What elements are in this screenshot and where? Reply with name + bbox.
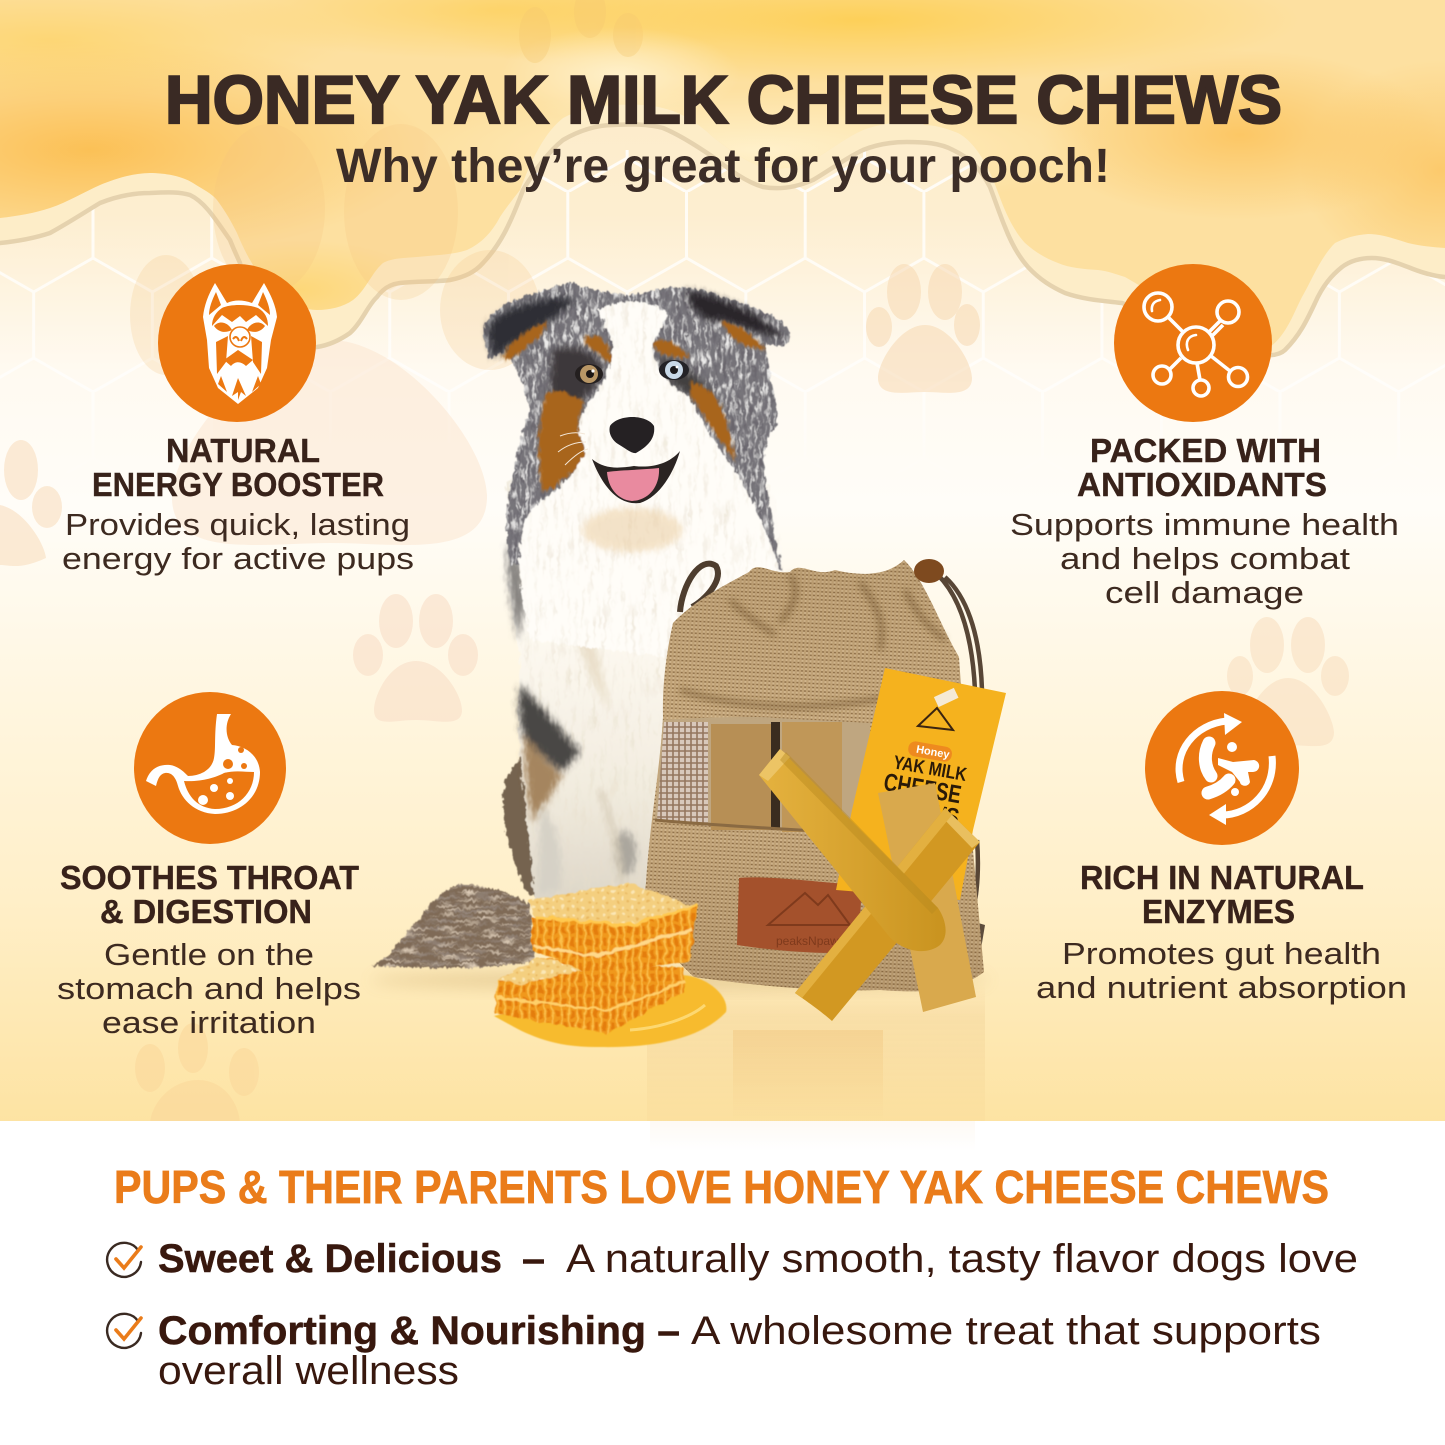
description — [1036, 936, 1407, 1005]
tag heading: CHEESE — [882, 768, 963, 809]
benefit: rich in natural enzymes — [1036, 691, 1407, 1005]
dog right eye — [659, 360, 689, 380]
dog tan markings — [503, 320, 765, 492]
bag rope tassel — [965, 920, 985, 955]
faded paw print: top centre — [519, 0, 643, 63]
bullet one: – — [522, 1237, 545, 1281]
bullet two — [107, 1309, 1321, 1393]
icon: check — [107, 1314, 141, 1348]
dog leg band — [508, 545, 580, 822]
bullet two: Comforting & Nourishing – — [158, 1309, 680, 1353]
bag shading — [645, 560, 984, 991]
description: Gentle on the — [104, 937, 314, 972]
honeycomb pattern — [0, 150, 1445, 381]
description: Promotes gut health — [1062, 936, 1381, 971]
bullet two: A wholesome treat that supports — [691, 1309, 1321, 1353]
honey wave band — [0, 0, 1445, 355]
description: and helps combat — [1060, 541, 1350, 576]
page background — [0, 0, 1445, 1125]
tag mountain logo — [918, 708, 953, 730]
icon: stomach — [134, 692, 286, 844]
chew inside bag right — [782, 722, 842, 832]
description: ease irritation — [102, 1005, 316, 1040]
dog illustration — [372, 282, 790, 968]
large faded paw toes: left — [130, 124, 540, 375]
faded paw print: upper centre right — [866, 264, 980, 393]
bag pocket seam — [655, 820, 870, 834]
description: cell damage — [1105, 575, 1304, 610]
description — [62, 507, 414, 576]
tag heading: CHEWS — [883, 792, 961, 832]
faded paw print: far left — [0, 440, 62, 566]
bullet two: overall wellness — [158, 1349, 459, 1393]
chew inside bag left — [711, 724, 771, 830]
tag honey pill — [907, 740, 953, 763]
tag heading — [878, 751, 968, 832]
heading: ANTIOXIDANTS — [1077, 466, 1327, 503]
honeycomb pieces — [494, 883, 726, 1047]
bag body — [645, 560, 984, 991]
tag heading: YAK MILK — [892, 752, 968, 786]
reflection of leather and tag — [733, 1030, 883, 1122]
panel heading: PUPS & THEIR PARENTS LOVE HONEY YAK CHEESE CHEWS — [114, 1161, 1329, 1213]
chew back — [878, 783, 976, 1012]
benefit: natural energy booster — [62, 264, 414, 576]
dog mouth — [592, 451, 680, 503]
dog fur mass — [372, 282, 790, 968]
bullet one: Sweet & Delicious — [158, 1237, 502, 1281]
dog left eye — [575, 364, 603, 384]
icon: enzymes — [1145, 691, 1299, 845]
description: Provides quick, lasting — [65, 507, 410, 542]
heading — [60, 859, 359, 930]
heading — [1080, 859, 1364, 930]
description — [57, 937, 361, 1040]
bag window — [655, 717, 870, 834]
leather patch — [737, 877, 862, 953]
heading: SOOTHES THROAT — [60, 859, 359, 896]
icon: check — [107, 1243, 141, 1277]
honey wave top — [0, 0, 1445, 360]
heading: NATURAL — [166, 432, 320, 469]
dog haunch — [503, 757, 552, 905]
dog whiskers — [558, 433, 588, 465]
heading: ENZYMES — [1142, 893, 1295, 930]
description: Supports immune health — [1010, 507, 1399, 542]
reflection under bag — [647, 985, 985, 1150]
bag bead — [914, 559, 944, 583]
heading: RICH IN NATURAL — [1080, 859, 1364, 896]
dog chest shadow — [582, 508, 682, 552]
ground shadow — [370, 971, 990, 989]
bag neck folds — [680, 575, 945, 706]
burlap bag product — [645, 559, 1006, 1150]
heading — [92, 432, 384, 503]
icon: molecule — [1114, 264, 1272, 422]
dog head fur — [484, 282, 790, 570]
benefit: soothes throat and digestion — [57, 692, 361, 1040]
yellow product tag — [836, 668, 1006, 900]
dog tongue — [607, 468, 659, 501]
bullet one — [107, 1237, 1358, 1281]
honey puddle — [494, 975, 726, 1047]
bullet one: A naturally smooth, tasty flavor dogs love — [566, 1237, 1358, 1281]
heading — [1077, 432, 1327, 503]
dog tail — [372, 884, 535, 968]
lower honeycomb slab — [494, 958, 684, 1033]
leather patch: peaksNpaws — [776, 934, 845, 948]
bag loop — [680, 564, 718, 612]
bag dark gap — [771, 722, 780, 830]
faded paw print: mid left — [353, 594, 478, 722]
icon: dog head — [158, 264, 316, 422]
bag rope right — [938, 575, 982, 925]
subtitle: Why they’re great for your pooch! — [336, 140, 1110, 193]
heading: PACKED WITH — [1090, 432, 1321, 469]
dog white face and chest — [519, 302, 785, 660]
tag hole label — [934, 688, 959, 707]
heading: ENERGY BOOSTER — [92, 466, 384, 503]
description: energy for active pups — [62, 541, 414, 576]
heading: & DIGESTION — [100, 893, 312, 930]
faded paw pad: left — [172, 340, 487, 545]
chew diagonal — [795, 808, 980, 1021]
bag window mesh — [657, 722, 708, 826]
title: HONEY YAK MILK CHEESE CHEWS — [165, 62, 1282, 138]
benefit: packed with antioxidants — [1010, 264, 1399, 610]
description: and nutrient absorption — [1036, 970, 1407, 1005]
faded paw print: mid right — [1227, 617, 1349, 746]
upper honeycomb slab — [528, 883, 697, 977]
panel: testimonials — [0, 1121, 1445, 1445]
puddle highlight — [630, 1005, 705, 1030]
faded paw print: bottom left — [135, 1023, 259, 1125]
panel reflection fade — [650, 1121, 975, 1151]
description: stomach and helps — [57, 971, 361, 1006]
chew front — [759, 749, 946, 951]
tag honey pill: Honey — [915, 744, 951, 761]
dog body — [506, 420, 785, 910]
description — [1010, 507, 1399, 610]
dog nose — [609, 417, 654, 453]
dog ear patches — [487, 290, 785, 408]
white panel background — [0, 1121, 1445, 1445]
dog leg shading — [538, 570, 636, 895]
